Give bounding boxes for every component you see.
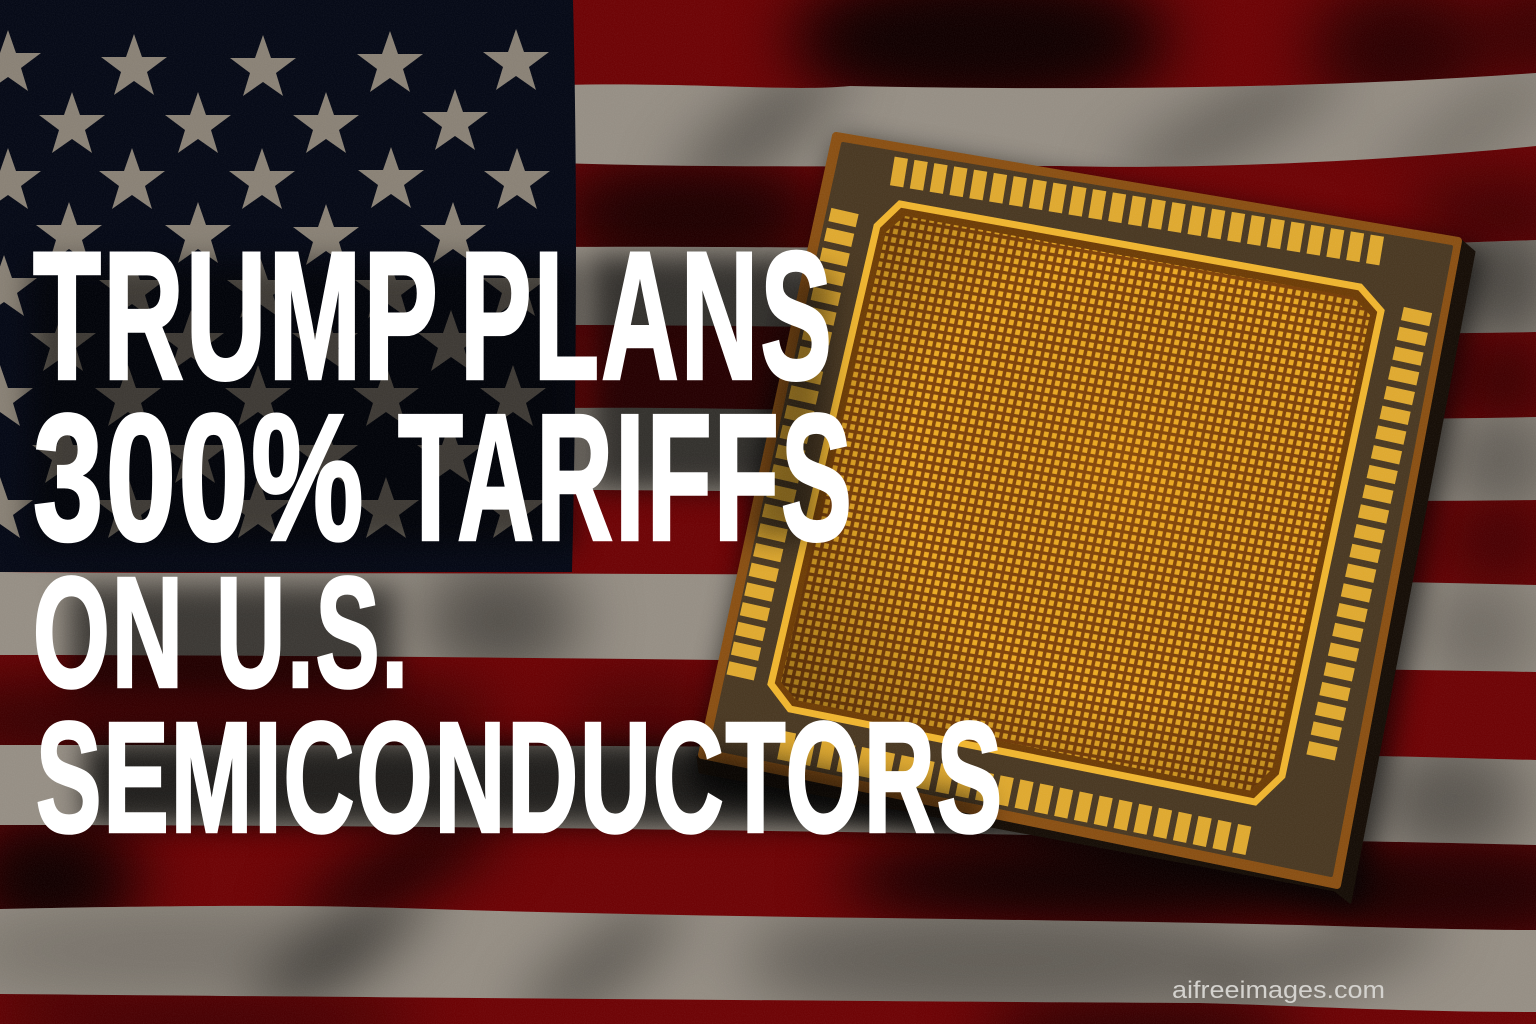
headline line 3: U.S.	[216, 546, 410, 720]
contact pads left	[740, 211, 845, 678]
chip body	[711, 144, 1451, 875]
contact pads bottom	[780, 745, 1254, 842]
chip shadow	[695, 140, 1482, 908]
chip side	[698, 240, 1474, 902]
headline line 3: ON	[33, 546, 185, 720]
contact pads right	[1320, 310, 1418, 760]
gold ring	[771, 204, 1381, 802]
core lighting	[781, 216, 1370, 791]
headline line 2: TARIFFS	[398, 378, 854, 578]
semiconductor chip	[695, 136, 1482, 908]
headline line 2: 300%	[33, 378, 366, 578]
canton with stars	[0, 0, 576, 572]
watermark: aifreeimages.com	[1172, 977, 1385, 1004]
processor core grid	[781, 216, 1370, 791]
shadow from headline on chip edge	[690, 270, 990, 830]
headline line 1: PLANS	[460, 214, 834, 418]
stars	[0, 29, 550, 538]
headline line 1: TRUMP	[33, 214, 438, 418]
headline	[33, 214, 1004, 866]
chip rim	[702, 136, 1458, 885]
contact pads top	[892, 171, 1382, 251]
shadow behind headline on flag	[30, 255, 985, 825]
